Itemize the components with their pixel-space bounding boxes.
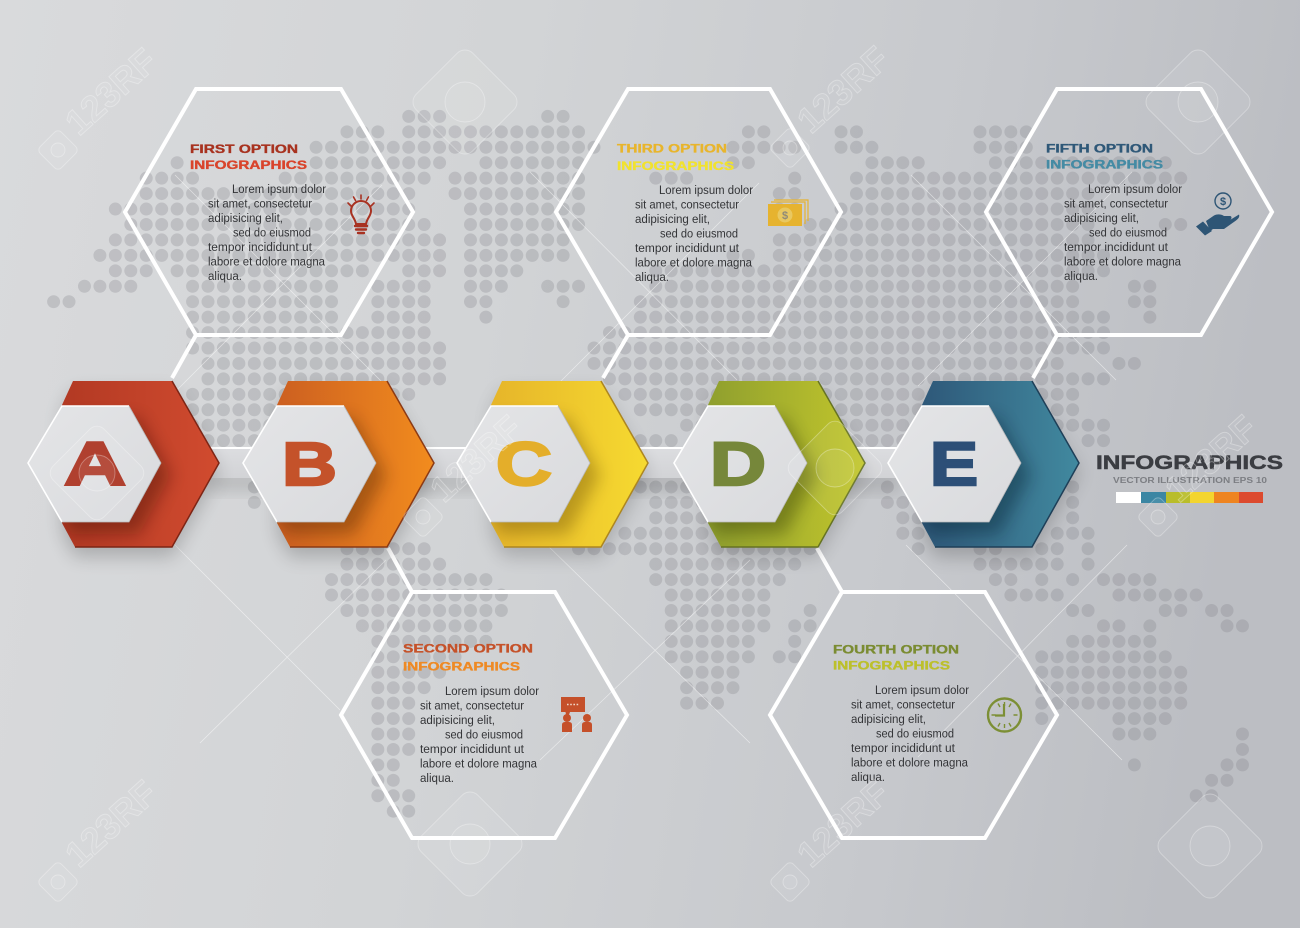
chevron E: [888, 381, 1079, 557]
chevron D: [674, 381, 865, 557]
watermark stamps: 123RF: [57, 772, 165, 875]
text block: third option: labore et dolore magna: [635, 256, 752, 270]
icon: clock: [988, 698, 1021, 732]
text block: fourth option: adipisicing elit,: [851, 712, 926, 726]
text block: third option: adipisicing elit,: [635, 212, 710, 226]
text block: first option: labore et dolore magna: [208, 254, 325, 268]
text block: fourth option: tempor incididunt ut: [851, 741, 956, 755]
text block: fifth option: Lorem ipsum dolor: [1088, 182, 1182, 196]
text block: third option: tempor incididunt ut: [635, 241, 740, 255]
icon: hand holding coin: $: [1220, 196, 1226, 208]
text block: fourth option: Lorem ipsum dolor: [875, 683, 969, 697]
text block: fifth option: INFOGRAPHICS: [1046, 160, 1163, 172]
text block: fourth option: sit amet, consectetur: [851, 698, 955, 712]
thin crossing lines: [170, 172, 1132, 760]
connector lines from hexagons to chevrons: [172, 335, 1057, 592]
text block: second option: aliqua.: [420, 771, 454, 785]
watermark stamps: 123RF: [57, 40, 165, 143]
chevron C: C: [496, 430, 552, 498]
horizontal strip: [210, 447, 900, 492]
icon: hand holding coin: [1196, 193, 1239, 236]
text block: second option: sit amet, consectetur: [420, 698, 524, 712]
brand title block: [1096, 453, 1283, 485]
text block: third option: sit amet, consectetur: [635, 198, 739, 212]
chevron A: A: [64, 430, 126, 498]
text block: fifth option: FIFTH OPTION: [1046, 144, 1153, 156]
text block: third option: Lorem ipsum dolor: [659, 183, 753, 197]
text block: fifth option: [1046, 144, 1182, 283]
colour legend bar: [1116, 492, 1263, 503]
text block: first option: Lorem ipsum dolor: [232, 182, 326, 196]
watermark stamps: 123RF: [789, 38, 897, 141]
text block: second option: INFOGRAPHICS: [403, 662, 520, 674]
text block: third option: [617, 144, 753, 284]
text block: first option: sit amet, consectetur: [208, 196, 312, 210]
text block: second option: adipisicing elit,: [420, 713, 495, 727]
hexagon outline: fifth option: [986, 89, 1272, 335]
chevron C: [457, 381, 648, 557]
text block: second option: labore et dolore magna: [420, 756, 537, 770]
text block: fourth option: sed do eiusmod: [876, 726, 954, 740]
hexagon outline: third option: [556, 89, 841, 335]
icon: two people chatting: [561, 697, 592, 732]
text block: fourth option: [833, 644, 969, 784]
text block: third option: INFOGRAPHICS: [617, 161, 734, 173]
text block: fifth option: tempor incididunt ut: [1064, 240, 1169, 254]
text block: first option: adipisicing elit,: [208, 211, 283, 225]
watermark stamps: 123RF: [1157, 407, 1265, 510]
text block: first option: sed do eiusmod: [233, 226, 311, 240]
text block: fifth option: sit amet, consectetur: [1064, 196, 1168, 210]
text block: fourth option: labore et dolore magna: [851, 756, 968, 770]
text block: second option: tempor incididunt ut: [420, 742, 525, 756]
text block: second option: SECOND OPTION: [403, 644, 533, 656]
icon: money bills: [768, 200, 808, 226]
text block: third option: aliqua.: [635, 270, 669, 284]
dotted world map: [54, 116, 1243, 811]
text block: third option: THIRD OPTION: [617, 144, 727, 156]
icon: money bills: $: [782, 210, 788, 222]
watermark stamps: 123RF: [789, 772, 897, 875]
text block: first option: FIRST OPTION: [190, 144, 298, 156]
text block: fourth option: FOURTH OPTION: [833, 644, 959, 656]
text block: fourth option: INFOGRAPHICS: [833, 660, 950, 672]
text block: fifth option: aliqua.: [1064, 269, 1098, 283]
text block: first option: tempor incididunt ut: [208, 240, 313, 254]
text block: second option: Lorem ipsum dolor: [445, 684, 539, 698]
watermark stamps: 123RF: [422, 407, 530, 510]
text block: second option: [403, 644, 539, 785]
chevron A: [28, 381, 219, 557]
text block: first option: aliqua.: [208, 269, 242, 283]
text block: fifth option: adipisicing elit,: [1064, 211, 1139, 225]
icon: light bulb: [348, 195, 374, 233]
brand title block: VECTOR ILLUSTRATION EPS 10: [1113, 476, 1268, 485]
hexagon outline: first option: [125, 89, 413, 335]
brand title block: INFOGRAPHICS: [1096, 453, 1283, 474]
text block: fifth option: labore et dolore magna: [1064, 254, 1181, 268]
text block: fifth option: sed do eiusmod: [1089, 226, 1167, 240]
chevron B: [243, 381, 434, 557]
chevron B: B: [282, 430, 337, 498]
chevron D: D: [710, 430, 766, 498]
text block: third option: sed do eiusmod: [660, 226, 738, 240]
text block: first option: [190, 144, 326, 283]
text block: first option: INFOGRAPHICS: [190, 160, 307, 172]
hexagon outline: second option: [341, 592, 627, 838]
hexagon outline: fourth option: [770, 592, 1057, 838]
text block: fourth option: aliqua.: [851, 770, 885, 784]
text block: second option: sed do eiusmod: [445, 728, 523, 742]
chevron E: E: [930, 430, 978, 498]
